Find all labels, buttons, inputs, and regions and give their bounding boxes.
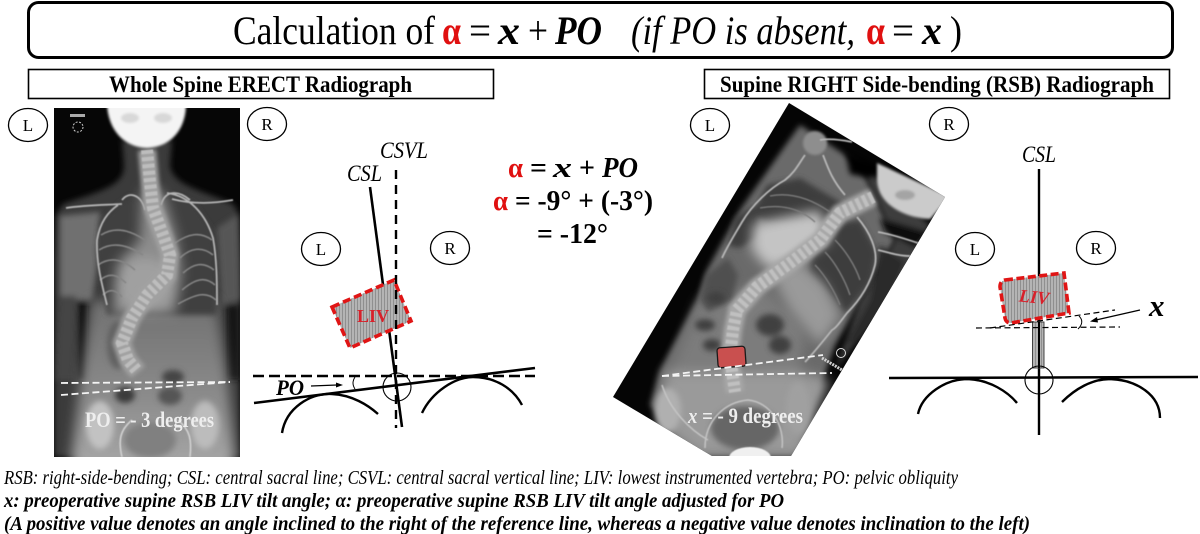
heading: erect radiograph [28, 70, 494, 98]
label: PO with arrow: PO [275, 375, 304, 400]
badge: R [1076, 232, 1116, 264]
badge: R erect radiograph [248, 108, 286, 140]
footnote: abbreviations: RSB: right-side-bending; CSL: central sacral line; CSVL: central sacral vertical line; LIV: lowest instrumented vertebra; PO: pelvic obliquity [3, 467, 959, 489]
title banner: = [469, 8, 491, 53]
skull [107, 104, 186, 148]
title banner: α [866, 8, 885, 53]
title banner: α [442, 8, 461, 53]
label: x angle arrow: x [1148, 288, 1164, 323]
title banner: + [528, 8, 548, 53]
vertebra LIV [1000, 273, 1069, 323]
rib and bone edges [722, 139, 918, 362]
heading: erect radiograph: Whole Spine ERECT Radiograph [109, 72, 412, 97]
erect schematic diagram [253, 138, 535, 433]
central formula: = -9° + (-3°) [515, 185, 653, 217]
central sacral line [370, 187, 402, 427]
label: PO value: PO = - 3 degrees [85, 407, 214, 432]
mediastinum and liver mass [112, 190, 182, 315]
vertebra LIV: LIV [1017, 285, 1052, 309]
label: x angle arrow [1078, 288, 1164, 329]
vertebra LIV: LIV [357, 306, 389, 326]
tilt angle dashed lines [976, 310, 1120, 328]
badge: L erect radiograph [8, 108, 48, 142]
badge: L: L [316, 240, 326, 259]
badge: R erect radiograph: R [261, 115, 273, 134]
pelvic tilt line [254, 368, 535, 403]
iliac crests [282, 377, 522, 433]
body silhouette [650, 125, 895, 456]
spine [122, 150, 170, 372]
sacral circle [1025, 366, 1053, 394]
bowel gas patches [695, 292, 791, 354]
erect whole spine radiograph [54, 104, 240, 470]
badge: L [956, 232, 994, 266]
label: x value: x = - 9 degrees [687, 403, 803, 428]
title banner: PO [554, 8, 602, 53]
badge: L [302, 232, 340, 266]
central formula: = -12° [537, 218, 608, 250]
label: PO with arrow [275, 375, 355, 400]
liver and mediastinum [752, 210, 840, 345]
title banner: (if PO is absent, [631, 8, 855, 53]
badge: R: R [444, 239, 456, 258]
sacral circle [383, 373, 411, 401]
supine right side-bending radiograph [613, 103, 950, 469]
badge: L erect radiograph: L [23, 116, 33, 135]
central formula: + [579, 152, 595, 184]
title banner [28, 2, 1172, 58]
lungs [94, 222, 218, 318]
iliac crests [918, 379, 1160, 418]
spine [730, 197, 873, 392]
central sacral vertical line [395, 170, 397, 428]
tilt dashed lines, side-bending film [662, 355, 832, 376]
title banner: Calculation of [233, 8, 436, 53]
heading: side-bending radiograph: Supine RIGHT Side-bending (RSB) Radiograph [720, 72, 1154, 97]
spinal stem [1032, 322, 1044, 368]
ribs and clavicles [98, 230, 216, 304]
pelvis [655, 382, 810, 450]
footnote: definitions: x: preoperative supine RSB LIV tilt angle; α: preoperative supine RSB LIV tilt angle adjusted for PO [3, 490, 784, 512]
central formula: PO [601, 152, 638, 184]
pelvic obliquity dashed lines, erect film [61, 382, 230, 395]
soft tissue silhouette [54, 140, 240, 457]
LIV highlight on radiograph [717, 346, 746, 368]
horizontal reference line [253, 375, 535, 377]
label: CSL: CSL [347, 161, 382, 186]
central formula: α [493, 185, 508, 217]
central formula [493, 152, 653, 250]
label: CSVL: CSVL [380, 138, 428, 163]
badge: R [430, 232, 470, 264]
badge: R side-bending radiograph: R [943, 115, 955, 134]
side-bending schematic diagram [889, 142, 1198, 435]
badge: L: L [970, 240, 980, 259]
central formula: α [508, 152, 523, 184]
badge: L side-bending radiograph [690, 108, 730, 142]
vertebra LIV [332, 280, 411, 348]
label: CSL: CSL [1022, 142, 1056, 167]
title banner: = [892, 8, 914, 53]
central sacral line [1038, 169, 1040, 435]
badge: R: R [1090, 239, 1102, 258]
title banner: ) [950, 8, 962, 53]
badge: L side-bending radiograph: L [705, 116, 715, 135]
title banner: x [921, 8, 942, 53]
lungs [700, 178, 877, 314]
horizontal pelvis line [889, 377, 1198, 378]
title banner: x [497, 8, 520, 53]
iliac edges [120, 420, 191, 457]
central formula: = [530, 152, 547, 184]
skull in corner [842, 152, 876, 180]
central formula: x [552, 152, 572, 184]
badge: R side-bending radiograph [930, 108, 968, 140]
